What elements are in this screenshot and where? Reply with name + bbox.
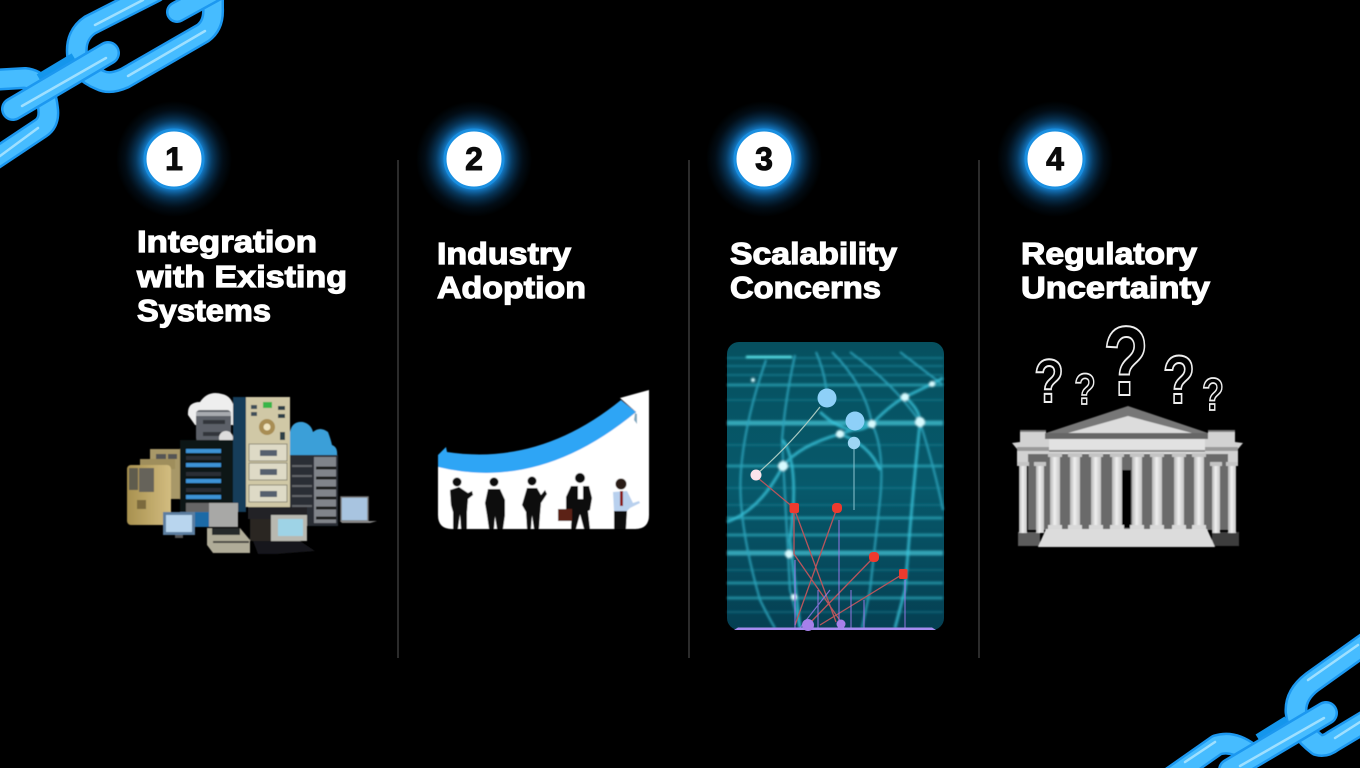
question marks: ? (1103, 307, 1149, 416)
question marks: ? (1034, 347, 1064, 415)
illustration: legacy servers and cloud (127, 393, 377, 554)
illustration: government building (1012, 406, 1243, 547)
floating circles (750, 388, 864, 480)
person 4 with briefcase (558, 473, 592, 529)
column 2: industry adoption (416, 101, 649, 529)
number badge 3 (706, 101, 822, 217)
illustration: growth arrow and business people (438, 390, 649, 529)
person 3 (522, 476, 547, 529)
heading 3 (730, 236, 898, 305)
heading 2 (437, 236, 586, 305)
heading 3: Concerns (730, 270, 881, 305)
column 4: regulatory uncertainty (997, 101, 1243, 547)
question marks (1034, 307, 1224, 420)
heading 4 (1021, 236, 1211, 305)
chain: top-left corner (0, 0, 228, 162)
person 2 (485, 478, 505, 529)
question marks: ? (1202, 369, 1224, 420)
network nodes (751, 378, 935, 600)
column 1: integration with existing systems (116, 101, 377, 554)
heading 1: Integration (137, 224, 317, 259)
number badge 1: 1 (165, 141, 183, 177)
person 1 (450, 478, 473, 529)
person 5 (613, 478, 640, 529)
heading 1: Systems (137, 293, 271, 328)
heading 1: with Existing (136, 259, 347, 294)
column 3: scalability concerns (706, 101, 944, 631)
heading 2: Industry (437, 236, 572, 271)
heading 3: Scalability (730, 236, 898, 271)
question marks: ? (1163, 342, 1195, 417)
number badge 4 (997, 101, 1113, 217)
number badge 3: 3 (755, 141, 773, 177)
red squares (790, 503, 908, 579)
illustration: network grid panel (727, 342, 944, 631)
number badge 2 (416, 101, 532, 217)
heading 4: Uncertainty (1021, 270, 1211, 305)
heading 2: Adoption (437, 270, 586, 305)
heading 1 (136, 224, 347, 328)
number badge 2: 2 (465, 141, 483, 177)
dividers (398, 160, 979, 658)
chain: bottom-right corner (1170, 642, 1360, 768)
question marks: ? (1074, 365, 1096, 414)
number badge 1 (116, 101, 232, 217)
columns (1019, 455, 1236, 533)
number badge 4: 4 (1046, 141, 1064, 177)
heading 4: Regulatory (1021, 236, 1198, 271)
